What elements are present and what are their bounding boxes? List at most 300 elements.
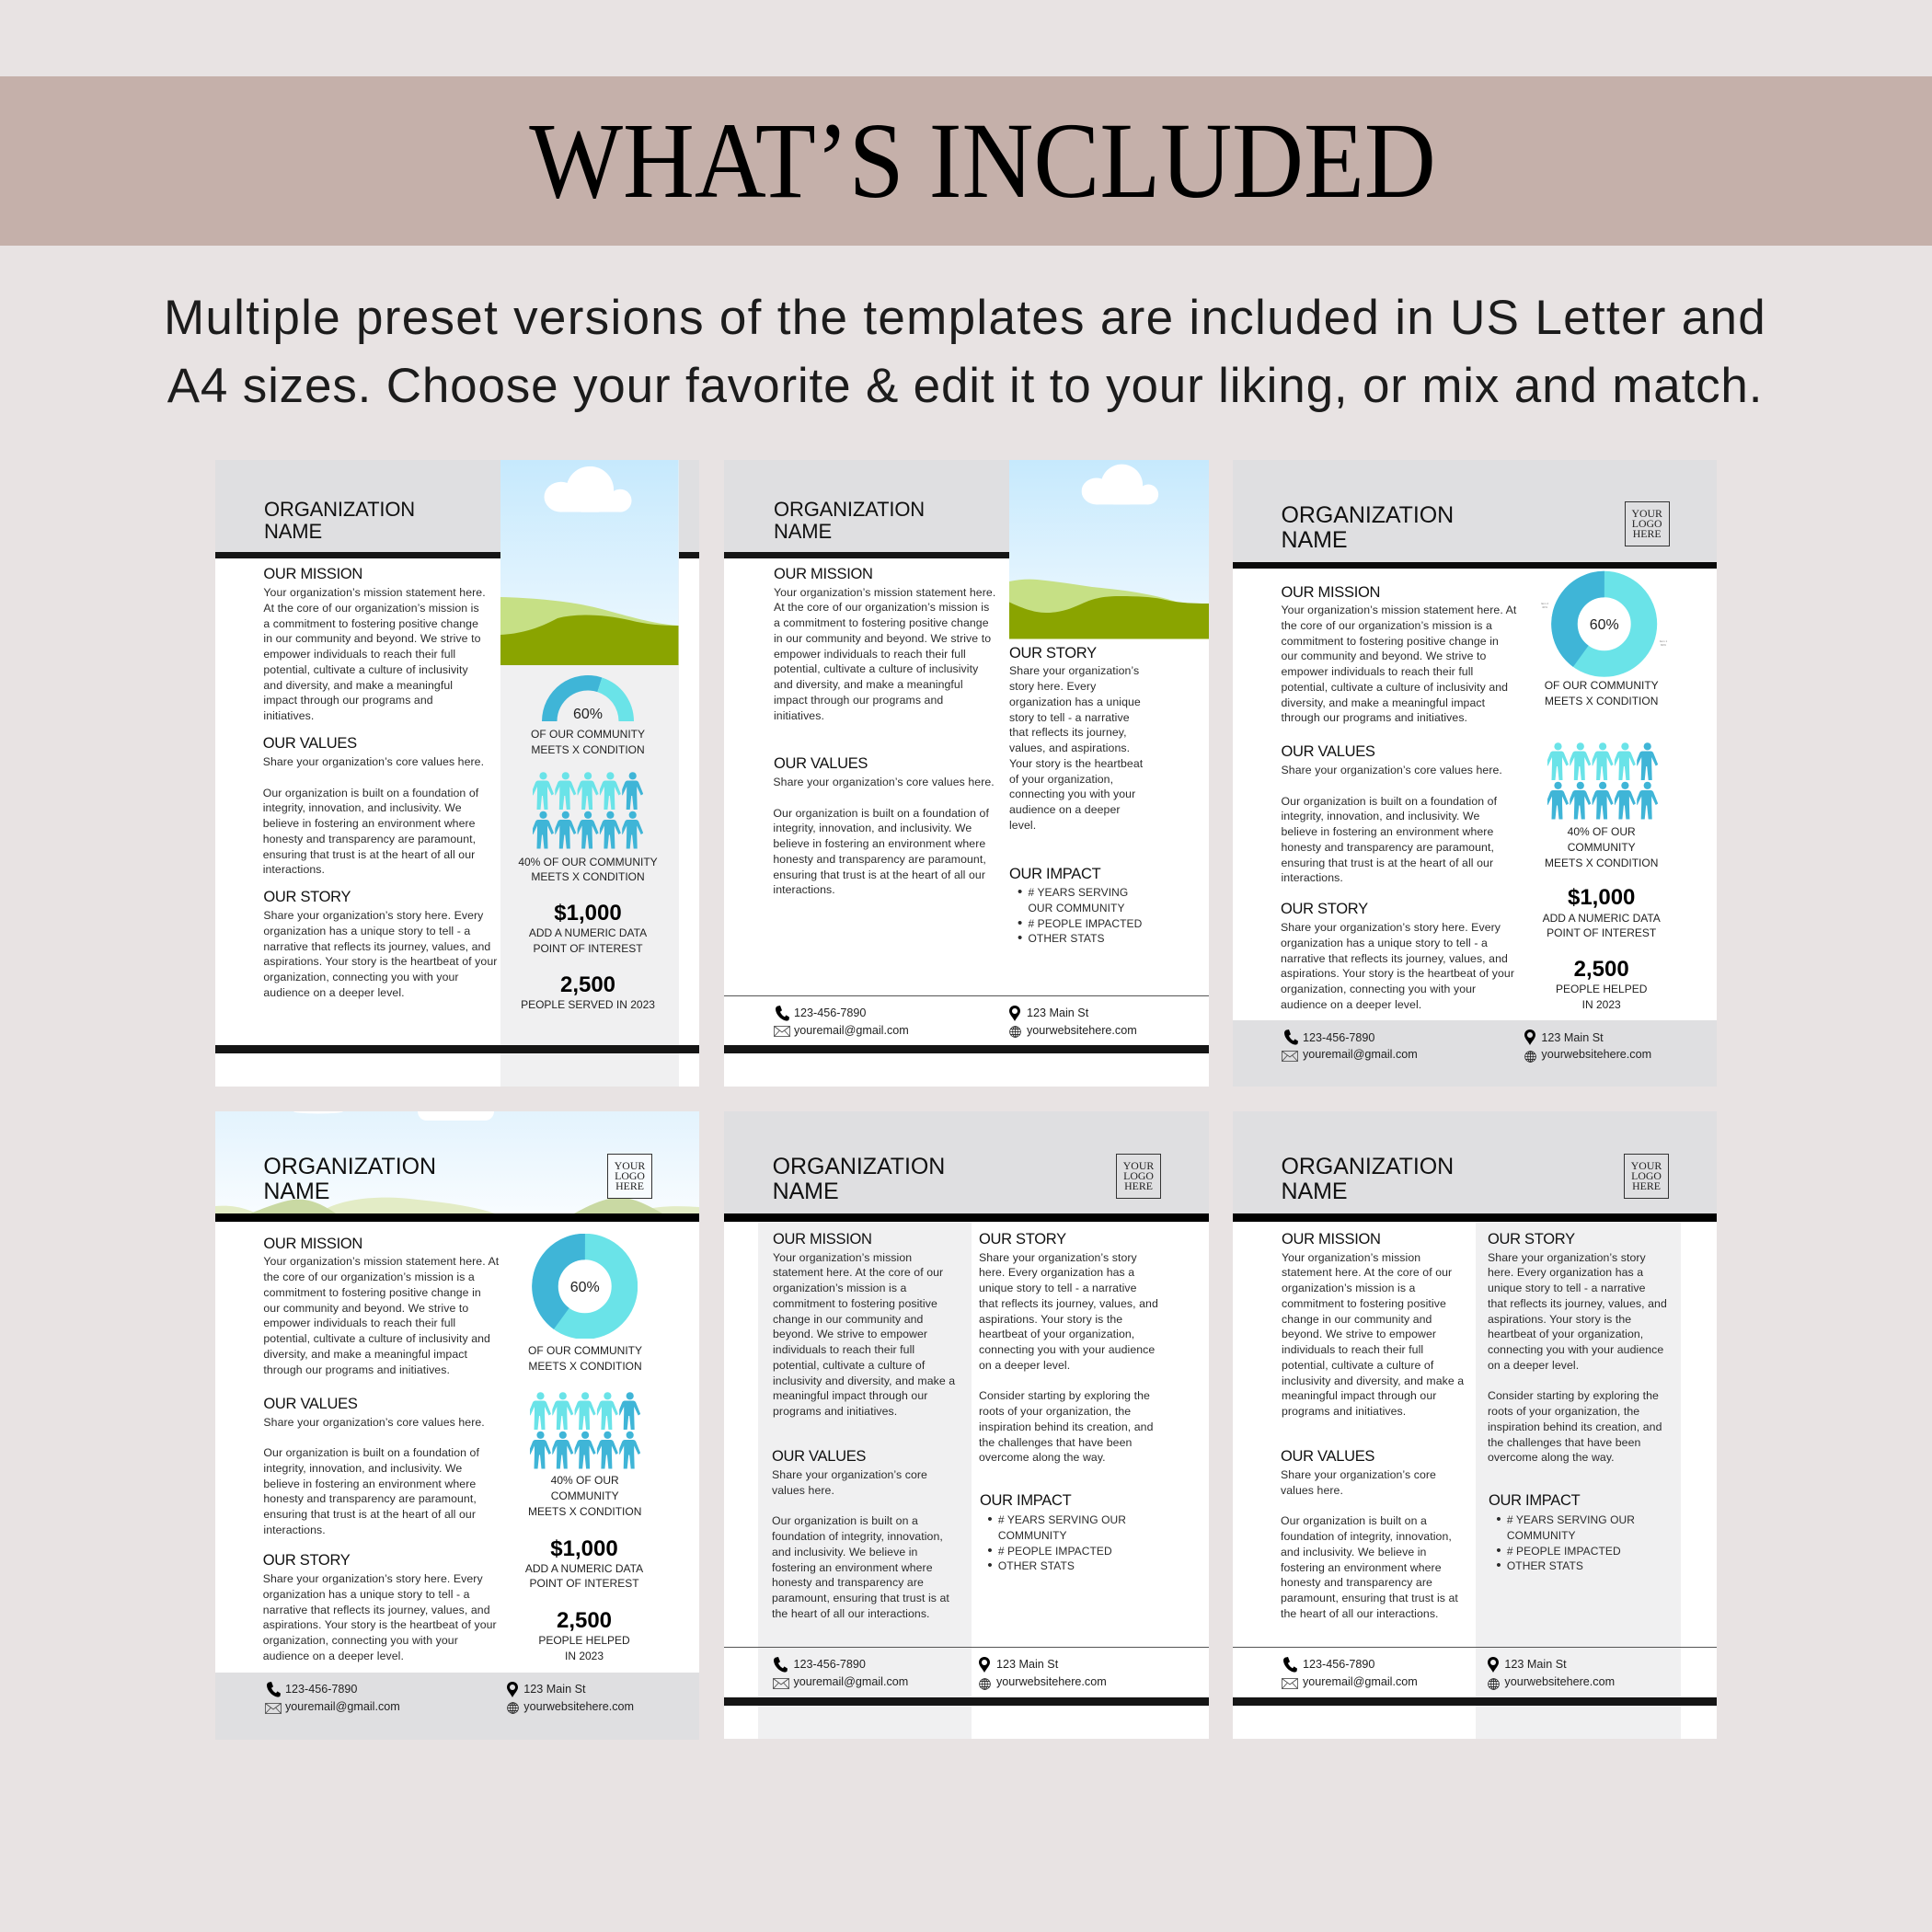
heading: organization name <box>1281 502 1454 553</box>
logo placeholder: HERE <box>1633 527 1662 540</box>
text: story: audience on a deeper level. <box>1281 998 1421 1011</box>
contact text: phone and email: 123-456-7890 <box>1303 1658 1374 1671</box>
text: story: organization has a unique story to tell - a <box>263 925 470 937</box>
text: story: here. Every organization has a <box>979 1266 1134 1279</box>
text: mission: potential, cultivate a culture of inclusivity <box>774 662 978 675</box>
text: mission: the core of our organization’s mission is a <box>263 1271 475 1283</box>
caption: community condition <box>1545 679 1659 707</box>
text: mission: potential, cultivate a culture of <box>773 1359 925 1372</box>
heading: organization name <box>774 498 925 543</box>
icon: globe <box>979 1678 991 1690</box>
list: impact stats: OTHER STATS <box>1029 932 1105 945</box>
contact text: phone and email <box>285 1681 400 1715</box>
text: mission: initiatives. <box>774 709 824 722</box>
text: story: Consider starting by exploring the <box>979 1389 1150 1402</box>
heading: organization name <box>263 1155 436 1204</box>
contact text: address and website: yourwebsitehere.com <box>1027 1023 1137 1036</box>
text: values: values here. <box>772 1484 834 1497</box>
panel: template 2 with image and contact footer <box>724 460 1209 1087</box>
heading: our mission: OUR MISSION <box>263 566 362 582</box>
heading: our mission: OUR MISSION <box>773 1231 872 1248</box>
text: mission: Your organization’s mission statement here. <box>263 586 486 599</box>
panel: template 3 with logo and donut: 60% <box>1661 643 1666 647</box>
chart: people pictogram <box>1547 742 1658 819</box>
contact text: address and website: 123 Main St <box>1027 1006 1088 1019</box>
heading: our mission: OUR MISSION <box>263 1236 362 1252</box>
contact block <box>265 1681 633 1714</box>
text: story: overcome along the way. <box>1488 1451 1615 1464</box>
panel: template 6 two columns, shaded right <box>1233 1111 1717 1739</box>
heading: organization name: ORGANIZATION <box>1281 502 1454 528</box>
list: impact stats: COMMUNITY <box>1507 1529 1576 1542</box>
contact text: address and website: 123 Main St <box>996 1658 1058 1671</box>
icon: pin <box>1009 1006 1020 1021</box>
list: impact stats: # YEARS SERVING <box>1029 886 1128 899</box>
text: story: connecting you with your <box>1009 788 1135 800</box>
text: mission: Your organization’s mission statement here. At <box>1281 604 1516 616</box>
text: mission: commitment to fostering positive <box>773 1297 937 1310</box>
text: mission: programs and initiatives. <box>773 1405 897 1418</box>
footer band with contact details <box>1233 1020 1717 1087</box>
contact text: address and website: yourwebsitehere.com <box>996 1674 1107 1687</box>
text: story: Your story is the heartbeat <box>1009 757 1143 770</box>
text: values: foundation of integrity, innovation, <box>1281 1530 1452 1543</box>
text: values: integrity, innovation, and inclusivity. We <box>263 801 462 814</box>
text: mission: organization’s mission is a <box>1282 1282 1415 1294</box>
text: values <box>1281 1467 1458 1621</box>
logo placeholder: LOGO <box>615 1169 645 1182</box>
text: mission: potential, cultivate a culture of <box>1282 1359 1433 1372</box>
text: story: here. Every organization has a <box>1488 1266 1643 1279</box>
list: impact stats: # PEOPLE IMPACTED <box>1507 1544 1621 1557</box>
caption: people helped: PEOPLE HELPED <box>538 1634 630 1647</box>
caption: 40 percent <box>493 1473 677 1519</box>
logo placeholder <box>1116 1154 1161 1199</box>
caption: numeric data: POINT OF INTEREST <box>529 1577 639 1590</box>
text: mission: potential, cultivate a culture of inclusivity and <box>1281 681 1508 694</box>
icon: mail <box>1282 1051 1298 1062</box>
icon: pin <box>979 1656 990 1673</box>
intro text: Multiple preset versions of the templates are included in US Letter and <box>164 291 1766 345</box>
text: story: story to tell - a narrative <box>1009 711 1130 724</box>
text: story: of your organization, <box>1009 773 1113 786</box>
list: impact stats <box>1018 884 1142 946</box>
text: story: level. <box>1009 819 1036 832</box>
text: story: narrative that reflects its journey, values, and <box>1281 951 1508 964</box>
list: impact stats: • <box>987 1558 993 1573</box>
icon: mail <box>1282 1678 1298 1689</box>
text: mission: empower individuals to reach their full <box>263 1317 455 1329</box>
text: values: interactions. <box>263 1524 326 1536</box>
list: impact stats: OUR COMMUNITY <box>1029 902 1125 914</box>
stat: 2,500: 2,500 <box>560 972 615 997</box>
text: mission: beyond. We strive to empower <box>773 1328 927 1340</box>
text: values: ensuring that trust is at the heart of all our <box>773 868 985 881</box>
text: mission: At the core of our organization’s mission is <box>263 602 479 615</box>
text: values: honesty and transparency are paramount, <box>1281 841 1494 854</box>
text: story: organization, connecting you with your <box>263 971 459 983</box>
text: mission <box>263 1254 499 1377</box>
caption: 40 percent: MEETS X CONDITION <box>1545 857 1658 869</box>
text: story: unique story to tell - a narrative <box>979 1282 1137 1294</box>
text: story <box>263 1571 497 1663</box>
list: impact stats <box>987 1512 1126 1574</box>
text: mission: our community and beyond. We strive to <box>263 1302 468 1315</box>
list: impact stats: # PEOPLE IMPACTED <box>998 1544 1112 1557</box>
contact block <box>774 1006 1137 1038</box>
text: values: ensuring that trust is at the heart of all our <box>1281 856 1493 868</box>
icon: pin <box>1524 1029 1535 1045</box>
text: story: unique story to tell - a narrative <box>1488 1282 1646 1294</box>
caption: community condition <box>493 1343 677 1374</box>
text: values: Share your organization’s core values here. <box>773 776 995 788</box>
heading: our impact: OUR IMPACT <box>1009 865 1100 881</box>
text: mission: a commitment to fostering positive change <box>263 616 478 629</box>
contact text: phone and email <box>793 1656 908 1690</box>
text: mission: our community and beyond. We strive to <box>1281 650 1486 662</box>
text: mission <box>263 586 486 722</box>
text: values: values here. <box>1281 1484 1343 1497</box>
text: values: Share your organization’s core <box>1281 1468 1436 1481</box>
caption: people served: PEOPLE SERVED IN 2023 <box>521 998 655 1011</box>
text: story <box>1009 664 1143 832</box>
contact text: phone and email: youremail@gmail.com <box>793 1674 908 1687</box>
text: values: Share your organization’s core <box>772 1468 927 1481</box>
heading: our values: OUR VALUES <box>774 755 868 772</box>
caption: people helped: PEOPLE HELPED <box>1556 983 1647 995</box>
intro text <box>164 291 1766 413</box>
text: story: audience on a deeper level. <box>263 1650 404 1662</box>
contact block <box>1282 1029 1651 1063</box>
heading: our story: OUR STORY <box>263 1552 350 1569</box>
heading: organization name <box>264 498 415 543</box>
text: values: Share your organization’s core values here. <box>1281 764 1502 776</box>
icon: phone <box>1284 1029 1298 1045</box>
text: values <box>263 755 484 876</box>
text: story: overcome along the way. <box>979 1451 1106 1464</box>
caption: numeric data: POINT OF INTEREST <box>533 942 643 955</box>
text: mission <box>774 586 995 722</box>
text: story: aspirations. Your story is the heartbeat of your <box>263 955 497 968</box>
logo placeholder: LOGO <box>1123 1169 1154 1182</box>
text: mission: At the core of our organization’s mission is <box>774 601 989 614</box>
list: impact stats: • <box>1496 1558 1501 1573</box>
stat: 2,500: 2,500 <box>1574 957 1629 982</box>
text: mission: through our programs and initiatives. <box>1281 711 1467 724</box>
image: sky, cloud and hills <box>500 460 679 665</box>
text: values: fostering an environment where <box>1281 1560 1442 1573</box>
text: values: Share your organization’s core values here. <box>263 755 484 768</box>
caption: 40 percent <box>1545 825 1658 869</box>
text: mission <box>773 1249 955 1420</box>
contact text: address and website: yourwebsitehere.com <box>523 1700 634 1713</box>
contact text: phone and email: 123-456-7890 <box>793 1658 866 1671</box>
text: story: connecting you with your audience <box>979 1343 1155 1356</box>
text: mission: programs and initiatives. <box>1282 1405 1406 1418</box>
text: mission: commitment to fostering positive change in <box>1281 635 1499 648</box>
text: story: narrative that reflects its journey, values, and <box>263 940 490 953</box>
text: story <box>1488 1249 1667 1466</box>
text: mission: statement here. At the core of our <box>1282 1266 1452 1279</box>
text: values: believe in fostering an environment where <box>263 1478 476 1490</box>
title banner <box>0 76 1932 246</box>
heading: our values: OUR VALUES <box>772 1448 866 1465</box>
text: mission: statement here. At the core of our <box>773 1266 943 1279</box>
caption: numeric data: ADD A NUMERIC DATA <box>1543 912 1661 925</box>
list: impact stats: # YEARS SERVING OUR <box>1507 1513 1635 1526</box>
text: mission: potential, cultivate a culture of inclusivity <box>263 663 468 676</box>
text: story: heartbeat of your organization, <box>979 1328 1134 1340</box>
contact text: address and website: 123 Main St <box>1541 1030 1604 1043</box>
logo placeholder <box>1625 501 1670 546</box>
icon: mail <box>774 1026 790 1037</box>
caption: numeric data <box>528 926 648 955</box>
text: mission: Your organization’s mission <box>1282 1251 1420 1264</box>
heading: organization name <box>1281 1155 1454 1204</box>
text: mission: in our community and beyond. We strive to <box>774 632 991 645</box>
text: values: believe in fostering an environment where <box>1281 825 1493 838</box>
text: story: Share your organization’s story <box>1488 1251 1646 1264</box>
text: values: believe in fostering an environment where <box>263 817 476 830</box>
text: story <box>979 1249 1158 1466</box>
contact text: phone and email: youremail@gmail.com <box>285 1700 400 1713</box>
list: impact stats: • <box>1018 930 1022 946</box>
list: impact stats: OTHER STATS <box>1507 1559 1583 1572</box>
caption: numeric data: POINT OF INTEREST <box>1547 926 1656 939</box>
text: story: inspiration behind its creation, and <box>1488 1420 1662 1433</box>
text: mission: impact through our programs and <box>263 694 433 707</box>
text: story: on a deeper level. <box>1488 1359 1579 1372</box>
text: mission: meaningful impact through our <box>1282 1389 1436 1402</box>
contact text: phone and email <box>1303 1656 1418 1690</box>
text: mission: Your organization’s mission statement here. <box>774 586 995 599</box>
heading: our story: OUR STORY <box>1009 645 1097 661</box>
caption: 40 percent: MEETS X CONDITION <box>531 870 645 883</box>
panel: template 4 with sky header <box>215 1111 699 1740</box>
text: values: paramount, ensuring that trust is at <box>1281 1592 1458 1604</box>
icon: globe <box>1009 1026 1021 1038</box>
text: mission: individuals to reach their full <box>773 1343 914 1356</box>
caption: numeric data: ADD A NUMERIC DATA <box>525 1562 643 1575</box>
heading: organization name: NAME <box>1281 527 1347 553</box>
caption: community condition: OF OUR COMMUNITY <box>1545 679 1659 692</box>
heading: our mission: OUR MISSION <box>774 566 873 582</box>
image: sky, cloud and hills <box>1009 460 1209 638</box>
text: values: Our organization is built on a foundation of <box>1281 795 1497 808</box>
icon: globe <box>1488 1678 1500 1690</box>
text: mission: initiatives. <box>263 709 314 722</box>
caption: community condition: MEETS X CONDITION <box>1545 695 1658 707</box>
text: mission: organization’s mission is a <box>773 1282 906 1294</box>
text: story: connecting you with your audience <box>1488 1343 1663 1356</box>
stat: $1,000: $1,000 <box>550 1536 618 1561</box>
text: story: roots of your organization, the <box>979 1405 1131 1418</box>
text: values: honesty and transparency are paramount, <box>263 1492 477 1505</box>
logo placeholder: YOUR <box>615 1159 645 1172</box>
logo placeholder: YOUR <box>1123 1159 1154 1172</box>
text: story: organization, connecting you with your <box>263 1634 458 1647</box>
contact text: phone and email: youremail@gmail.com <box>1303 1674 1418 1687</box>
text: values: fostering an environment where <box>772 1560 933 1573</box>
text: values: Our organization is built on a <box>772 1514 918 1527</box>
intro text: A4 sizes. Choose your favorite & edit it to your liking, or mix and match. <box>167 359 1763 413</box>
text: values <box>773 776 995 896</box>
text: values: interactions. <box>1281 871 1343 884</box>
text: story: audience on a deeper <box>1009 803 1121 816</box>
caption: 40 percent: 40% OF OUR <box>1568 825 1636 838</box>
icon: phone <box>776 1006 789 1021</box>
logo placeholder: LOGO <box>1631 1169 1662 1182</box>
text: story: Consider starting by exploring the <box>1488 1389 1659 1402</box>
text: mission: impact through our programs and <box>774 694 943 707</box>
contact text: phone and email <box>1303 1030 1418 1061</box>
text: story: organization has a unique story to tell - a <box>263 1588 470 1601</box>
text: story: aspirations. Your story is the <box>1488 1312 1631 1325</box>
text: mission: empower individuals to reach their full <box>774 648 966 661</box>
contact text: phone and email <box>794 1006 909 1036</box>
text: story: Share your organization’s <box>1009 664 1139 677</box>
caption: community condition: OF OUR COMMUNITY <box>531 728 645 741</box>
contact text: address and website: yourwebsitehere.com <box>1541 1048 1651 1061</box>
text: values: and inclusivity. We believe in <box>1281 1546 1426 1558</box>
caption: people helped <box>492 1633 676 1664</box>
text: mission: commitment to fostering positive <box>1282 1297 1446 1310</box>
heading: organization name: NAME <box>1281 1179 1347 1204</box>
contact text: address and website <box>523 1681 634 1715</box>
chart: donut 60% <box>1541 570 1667 677</box>
text: story: on a deeper level. <box>979 1359 1070 1372</box>
text: values: the heart of all our interactions. <box>772 1607 930 1620</box>
text: story: organization has a unique story to tell - a <box>1281 937 1488 949</box>
text: mission: commitment to fostering positive change in <box>263 1286 481 1299</box>
text: values <box>1281 764 1502 884</box>
text: values: honesty and transparency are <box>1281 1576 1432 1589</box>
list: impact stats: OTHER STATS <box>998 1559 1075 1572</box>
text: mission: and diversity, and make a meaningful <box>263 679 453 692</box>
text: story: values, and aspirations. <box>1009 742 1130 754</box>
text: story: that reflects its journey, values, and <box>1488 1297 1667 1310</box>
text: story: the challenges that have been <box>1488 1435 1640 1448</box>
heading: our values: OUR VALUES <box>1281 743 1375 760</box>
text: mission: a commitment to fostering positive change <box>774 616 989 629</box>
icon: phone <box>266 1682 281 1696</box>
stat: $1,000: $1,000 <box>554 901 622 926</box>
caption: 40 percent: MEETS X CONDITION <box>528 1505 641 1518</box>
text: story: the challenges that have been <box>979 1435 1132 1448</box>
logo placeholder: HERE <box>615 1179 644 1192</box>
icon: phone <box>1282 1656 1297 1673</box>
text: story: Share your organization’s story here. Every <box>263 909 483 922</box>
text: values: integrity, innovation, and inclusivity. We <box>1281 810 1479 822</box>
heading: organization name <box>773 1155 945 1204</box>
icon: globe <box>1524 1051 1536 1063</box>
caption: people helped <box>1556 983 1647 1011</box>
logo placeholder: YOUR <box>1631 1159 1662 1172</box>
caption: 40 percent: 40% OF OUR COMMUNITY <box>518 856 658 868</box>
heading: our story: OUR STORY <box>263 889 351 905</box>
text: mission: in our community and beyond. We strive to <box>263 632 481 645</box>
logo placeholder: HERE <box>1632 1179 1661 1192</box>
text: story: Share your organization’s story here. Every <box>1281 921 1501 934</box>
text: values: honesty and transparency are <box>772 1576 924 1589</box>
text: story <box>263 909 497 999</box>
contact text: address and website: 123 Main St <box>1504 1658 1567 1671</box>
chart: people pictogram <box>533 772 644 848</box>
icon: mail <box>265 1703 282 1714</box>
contact text: address and website <box>1027 1006 1137 1036</box>
list: impact stats: # PEOPLE IMPACTED <box>1029 916 1142 929</box>
text: values: interactions. <box>773 883 835 896</box>
list: impact stats: • <box>1496 1542 1501 1558</box>
text: values: interactions. <box>263 863 325 876</box>
text: mission: diversity, and make a meaningful impact <box>1281 696 1485 708</box>
panel: template 1 with tall image sidebar <box>215 460 699 1087</box>
heading: our story: OUR STORY <box>1281 901 1368 917</box>
caption: community condition: OF OUR COMMUNITY <box>528 1344 642 1357</box>
heading: our story: OUR STORY <box>1488 1231 1575 1248</box>
panel: template 5 two columns, shaded left <box>724 1111 1209 1739</box>
text: story: that reflects its journey, <box>1009 726 1127 739</box>
text: story: narrative that reflects its journey, values, and <box>263 1603 490 1616</box>
heading: our story: OUR STORY <box>979 1231 1066 1248</box>
text: values: and inclusivity. We believe in <box>772 1546 917 1558</box>
caption: 40 percent: 40% OF OUR <box>551 1474 619 1487</box>
contact text: phone and email: youremail@gmail.com <box>1303 1048 1418 1061</box>
text: story: aspirations. Your story is the heartbeat of your <box>263 1618 497 1631</box>
text: values: paramount, ensuring that trust is at <box>772 1592 949 1604</box>
text: values: Our organization is built on a <box>1281 1514 1427 1527</box>
heading: our values: OUR VALUES <box>1281 1448 1374 1465</box>
text: mission: through our programs and initiatives. <box>263 1363 450 1376</box>
stat: $1,000: $1,000 <box>1568 885 1635 910</box>
contact text: address and website <box>996 1656 1107 1690</box>
text: values: Share your organization’s core values here. <box>263 1415 485 1428</box>
text: mission: Your organization’s mission statement here. At <box>263 1255 499 1268</box>
heading: organization name: ORGANIZATION <box>774 498 925 521</box>
text: story: aspirations. Your story is the <box>979 1312 1122 1325</box>
contact text: address and website <box>1541 1029 1651 1064</box>
text: mission <box>1281 604 1516 724</box>
text: values: integrity, innovation, and inclusivity. We <box>773 822 972 834</box>
text: values <box>772 1467 949 1621</box>
text: story: heartbeat of your organization, <box>1488 1328 1643 1340</box>
contact text: address and website: 123 Main St <box>523 1683 586 1696</box>
text: story: story here. Every <box>1009 680 1096 693</box>
caption: 40 percent: COMMUNITY <box>551 1489 619 1502</box>
text: values: Our organization is built on a foundation of <box>263 786 478 799</box>
text: story: audience on a deeper level. <box>263 986 405 999</box>
text: story: inspiration behind its creation, and <box>979 1420 1154 1433</box>
text: mission: empower individuals to reach their full <box>1281 665 1473 678</box>
text: values: Our organization is built on a foundation of <box>263 1446 479 1459</box>
list: impact stats: # YEARS SERVING OUR <box>998 1513 1126 1526</box>
heading: organization name: NAME <box>773 1179 839 1204</box>
icon: phone <box>773 1656 788 1673</box>
text: values: honesty and transparency are paramount, <box>263 833 476 845</box>
text: mission: meaningful impact through our <box>773 1389 927 1402</box>
list: impact stats: • <box>1496 1512 1501 1527</box>
caption: 40 percent: COMMUNITY <box>1568 841 1636 854</box>
text: story: roots of your organization, the <box>1488 1405 1639 1418</box>
logo placeholder <box>1624 1154 1669 1199</box>
text: mission: diversity, and make a meaningful impact <box>263 1348 467 1361</box>
list: impact stats: • <box>1018 884 1022 900</box>
panel: template 3 with logo and donut: 40% <box>1542 605 1547 609</box>
icon: pin <box>507 1682 518 1696</box>
text: values <box>263 1415 485 1538</box>
image: pale sky header with hills <box>215 1111 699 1213</box>
panel: template 3 with logo and donut <box>1233 460 1717 1087</box>
